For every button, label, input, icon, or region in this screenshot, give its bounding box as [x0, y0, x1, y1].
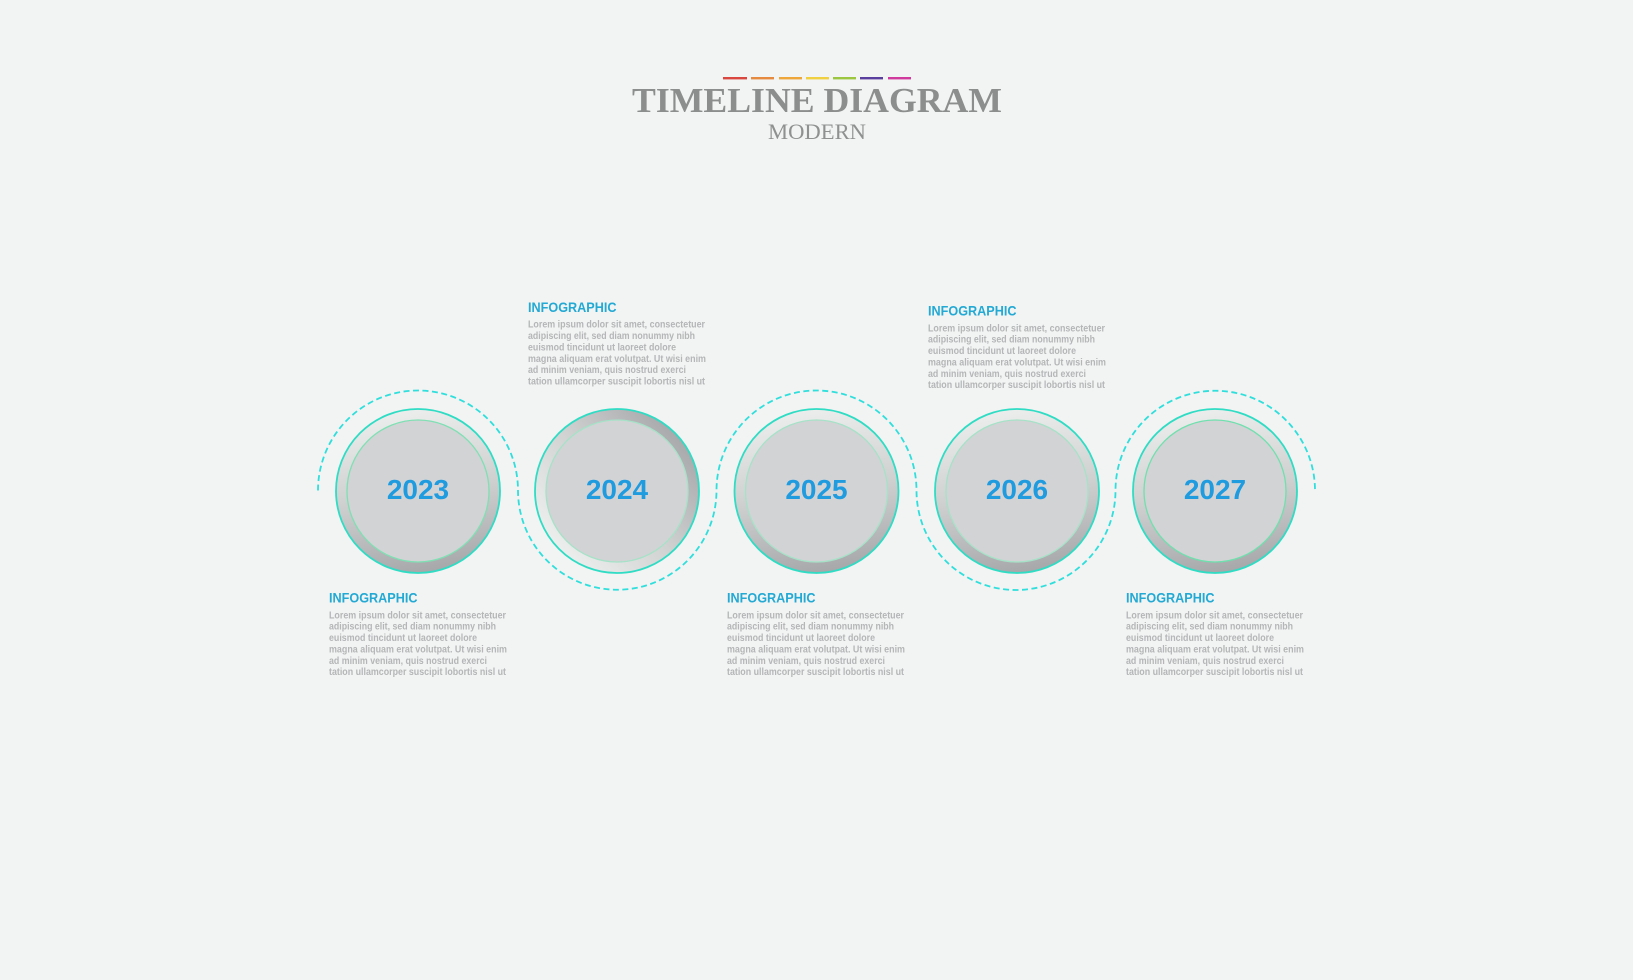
dashed wave connector: [318, 390, 1315, 590]
text block: 2025: INFOGRAPHIC: [727, 590, 816, 606]
text block: 2027: ad minim veniam, quis nostrud exerci: [1126, 656, 1284, 667]
text block: 2023: euismod tincidunt ut laoreet dolore: [329, 633, 477, 644]
rainbow dashes: [723, 77, 911, 79]
node: 2026: [935, 409, 1099, 573]
text block: 2027: INFOGRAPHIC: [1126, 590, 1214, 606]
text block: 2024: [528, 299, 706, 388]
text block: 2027: [1126, 590, 1304, 678]
text block: 2027: euismod tincidunt ut laoreet dolore: [1126, 633, 1274, 644]
node: 2024: [535, 409, 699, 573]
text block: 2023: magna aliquam erat volutpat. Ut wisi enim: [329, 644, 507, 655]
text block: 2026: Lorem ipsum dolor sit amet, consectetuer: [928, 323, 1105, 334]
text block: 2027: magna aliquam erat volutpat. Ut wisi enim: [1126, 644, 1304, 655]
text block: 2024: magna aliquam erat volutpat. Ut wisi enim: [528, 354, 706, 365]
text block: 2026: tation ullamcorper suscipit lobortis nisl ut: [928, 380, 1106, 391]
text block: 2026: INFOGRAPHIC: [928, 303, 1016, 319]
text block: 2024: INFOGRAPHIC: [528, 299, 616, 315]
text block: 2025: ad minim veniam, quis nostrud exerci: [727, 656, 885, 667]
subheading: MODERN: [768, 119, 866, 144]
text block: 2024: ad minim veniam, quis nostrud exerci: [528, 365, 686, 376]
node: 2023: 2023: [387, 474, 449, 505]
text block: 2025: tation ullamcorper suscipit lobortis nisl ut: [727, 667, 905, 678]
text block: 2026: adipiscing elit, sed diam nonummy nibh: [928, 335, 1095, 346]
heading: TIMELINE DIAGRAM: [632, 81, 1002, 120]
text block: 2025: Lorem ipsum dolor sit amet, consectetuer: [727, 610, 904, 621]
node: 2026: 2026: [986, 474, 1048, 505]
text block: 2026: euismod tincidunt ut laoreet dolore: [928, 346, 1076, 357]
text block: 2026: [928, 303, 1106, 391]
text block: 2023: [329, 590, 507, 678]
text block: 2026: ad minim veniam, quis nostrud exerci: [928, 369, 1086, 380]
title block: [632, 77, 1002, 144]
text block: 2025: [727, 590, 905, 678]
text block: 2023: INFOGRAPHIC: [329, 590, 418, 606]
text block: 2023: adipiscing elit, sed diam nonummy nibh: [329, 622, 496, 633]
text block: 2024: adipiscing elit, sed diam nonummy nibh: [528, 331, 695, 342]
node: 2025: [734, 409, 898, 573]
text block: 2027: tation ullamcorper suscipit lobortis nisl ut: [1126, 667, 1304, 678]
text block: 2024: Lorem ipsum dolor sit amet, consectetuer: [528, 320, 705, 331]
text block: 2024: tation ullamcorper suscipit lobortis nisl ut: [528, 377, 706, 388]
text block: 2023: ad minim veniam, quis nostrud exerci: [329, 656, 487, 667]
node: 2027: [1133, 409, 1297, 573]
text block: 2025: euismod tincidunt ut laoreet dolore: [727, 633, 875, 644]
node: 2027: 2027: [1184, 474, 1246, 505]
text block: 2025: adipiscing elit, sed diam nonummy nibh: [727, 622, 894, 633]
text block: 2027: Lorem ipsum dolor sit amet, consectetuer: [1126, 610, 1303, 621]
text block: 2025: magna aliquam erat volutpat. Ut wisi enim: [727, 644, 905, 655]
text block: 2026: magna aliquam erat volutpat. Ut wisi enim: [928, 357, 1106, 368]
text block: 2023: tation ullamcorper suscipit lobortis nisl ut: [329, 667, 507, 678]
text block: 2023: Lorem ipsum dolor sit amet, consectetuer: [329, 610, 506, 621]
text block: 2027: adipiscing elit, sed diam nonummy nibh: [1126, 622, 1293, 633]
text block: 2024: euismod tincidunt ut laoreet dolore: [528, 342, 676, 353]
node: 2023: [336, 409, 500, 573]
node: 2024: 2024: [586, 474, 649, 505]
node: 2025: 2025: [785, 474, 848, 505]
